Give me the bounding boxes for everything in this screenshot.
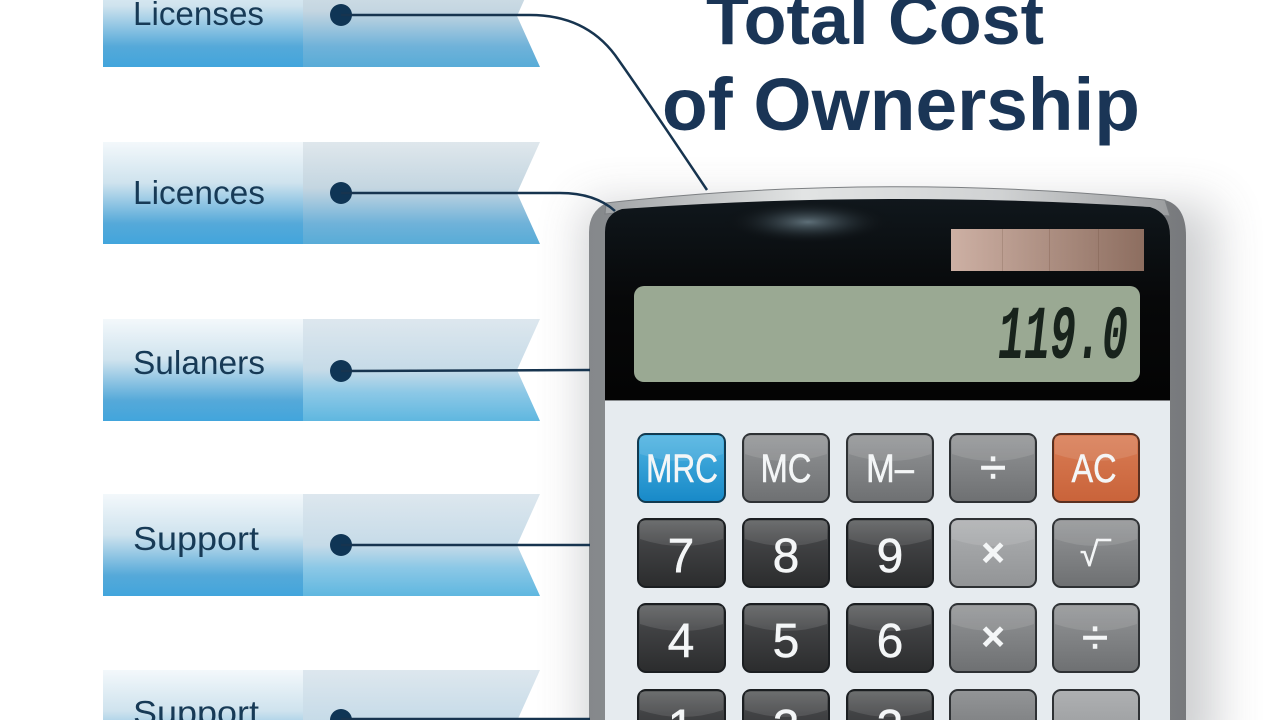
button divide 2: ÷ xyxy=(1082,612,1108,665)
banner: Licences xyxy=(103,142,540,244)
button MRC: MRC xyxy=(646,447,718,491)
button square root xyxy=(1053,519,1139,587)
connector: Support (cropped) to calculator xyxy=(330,709,590,720)
LCD display xyxy=(634,286,1140,382)
banner: Sulaners: Sulaners xyxy=(133,344,265,381)
connector: Sulaners to calculator xyxy=(330,360,590,382)
button 5: 5 xyxy=(773,615,799,668)
button 7: 7 xyxy=(668,530,694,583)
button multiply: × xyxy=(981,615,1005,659)
button 3 xyxy=(847,690,933,720)
button multiply light: × xyxy=(981,531,1005,575)
button 2 xyxy=(743,690,829,720)
button MC xyxy=(743,434,829,502)
button AC: AC xyxy=(1072,447,1116,491)
button 1 xyxy=(638,690,725,720)
button multiply light xyxy=(950,519,1036,587)
button 4: 4 xyxy=(668,615,694,668)
banner: Licences: Licences xyxy=(133,174,265,211)
button blank 2 xyxy=(1053,690,1139,720)
title xyxy=(662,0,1140,146)
button 5 xyxy=(743,604,829,672)
keypad panel xyxy=(605,401,1170,720)
button 6 xyxy=(847,604,933,672)
button M- xyxy=(847,434,933,502)
calculator shadow xyxy=(585,205,1215,720)
button 4 xyxy=(638,604,725,672)
button divide 2 xyxy=(1053,604,1139,672)
calculator xyxy=(589,187,1186,720)
button divide xyxy=(950,434,1036,502)
banner: Licenses xyxy=(103,0,540,67)
button divide: ÷ xyxy=(980,442,1006,495)
connector: Support to calculator xyxy=(330,534,590,556)
highlight on housing xyxy=(723,200,893,244)
button 8 xyxy=(743,519,829,587)
button 7 xyxy=(638,519,725,587)
button AC xyxy=(1053,434,1139,502)
connector: Licences to calculator xyxy=(330,182,615,211)
calculator body xyxy=(589,187,1186,720)
banner: Support xyxy=(103,494,540,596)
button M-: M– xyxy=(866,447,915,491)
connector: Licenses to calculator xyxy=(330,4,707,190)
button MRC xyxy=(638,434,725,502)
button square root: √‾ xyxy=(1080,536,1112,574)
banner: Sulaners xyxy=(103,319,540,421)
button MC: MC xyxy=(760,447,812,491)
button 6: 6 xyxy=(877,615,903,668)
button 9: 9 xyxy=(877,530,903,583)
calculator top rim xyxy=(605,187,1170,216)
banner: Support (cropped) xyxy=(103,670,540,720)
solar panel xyxy=(951,229,1144,271)
LCD display: 119.0 xyxy=(998,295,1128,381)
button blank 1 xyxy=(950,690,1036,720)
banner: Support: Support xyxy=(133,520,259,557)
button multiply xyxy=(950,604,1036,672)
display housing xyxy=(605,199,1170,400)
button 8: 8 xyxy=(773,530,799,583)
button 9 xyxy=(847,519,933,587)
title: of Ownership xyxy=(662,63,1140,146)
